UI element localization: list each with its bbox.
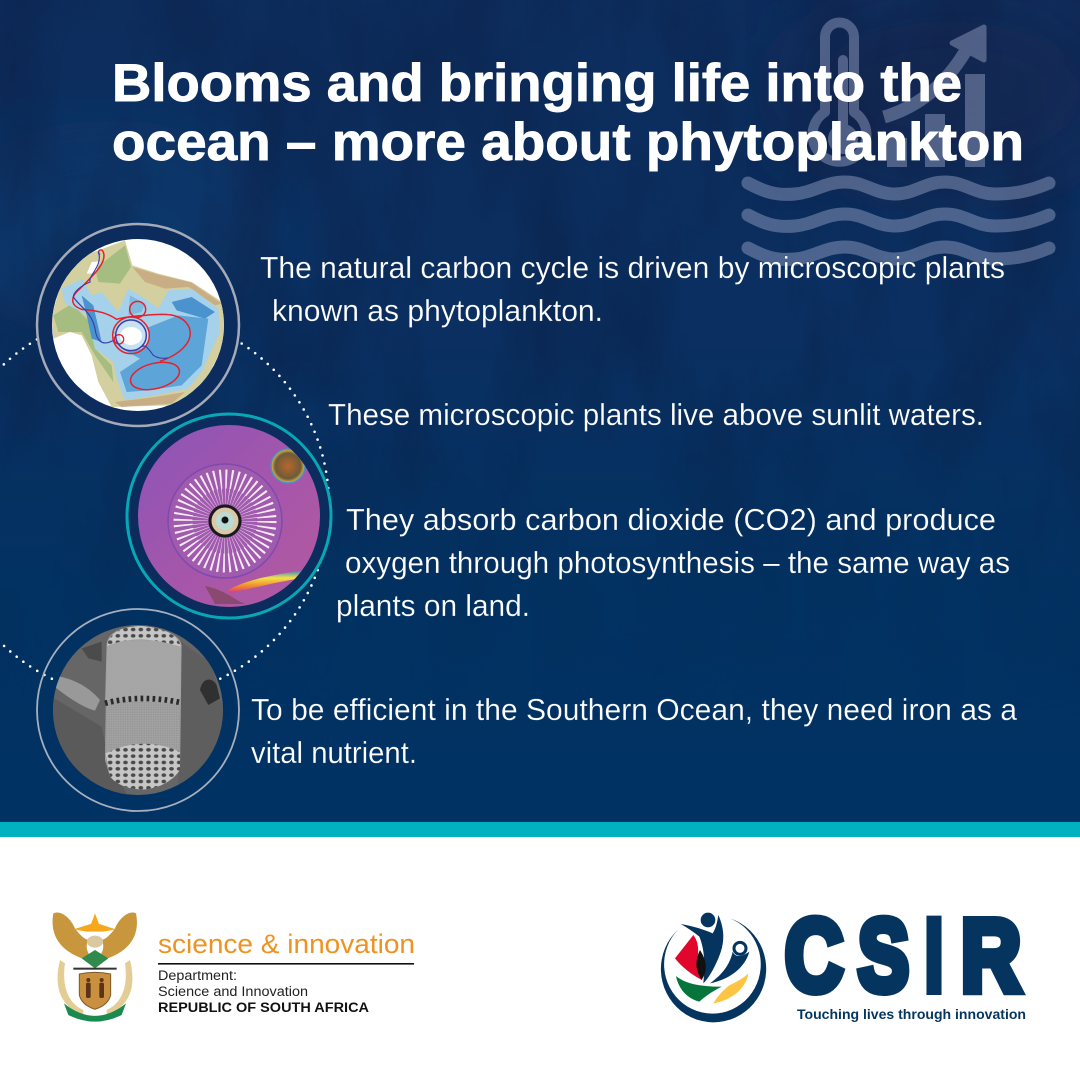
icon: thermometer, rising arrow, bars and waves xyxy=(748,22,1049,259)
logo wordmark: CSIR: S xyxy=(858,898,909,1012)
logo wordmark: CSIR: I xyxy=(925,898,943,1012)
rainbow streak xyxy=(228,570,305,593)
logo wordmark: CSIR: R xyxy=(961,898,1021,1012)
frustule bottom honeycomb xyxy=(106,744,180,789)
text block: carbon cycle xyxy=(260,250,1005,328)
tagline: Touching lives through innovation xyxy=(797,1007,1026,1022)
image circle: diatom microscopy xyxy=(127,414,331,618)
map land xyxy=(52,240,225,407)
text block: photosynthesis: oxygen through photosynthesis – the same way as xyxy=(345,545,1010,580)
logo mark: CSIR emblem xyxy=(661,913,766,1022)
teal divider band xyxy=(0,822,1080,837)
text block: carbon cycle: known as phytoplankton. xyxy=(272,293,603,328)
logo text: science & innovation department: Science and Innovation xyxy=(158,984,308,999)
logo text: science & innovation department: science & innovation xyxy=(158,929,415,959)
logo wordmark: CSIR: C xyxy=(785,898,843,1012)
logo: South African coat of arms xyxy=(53,912,137,1022)
text block: iron nutrient xyxy=(251,692,1018,770)
text block: iron nutrient: To be efficient in the Southern Ocean, they need iron as a xyxy=(251,692,1018,727)
text block: sunlit waters: These microscopic plants live above sunlit waters. xyxy=(328,397,984,432)
title: ocean – more about phytoplankton xyxy=(112,113,1024,172)
diatom disc xyxy=(168,464,282,578)
logo wordmark: CSIR xyxy=(785,898,1021,1012)
frustule upper body xyxy=(105,640,181,703)
text block: carbon cycle: The natural carbon cycle is driven by microscopic plants xyxy=(260,250,1005,285)
text block: photosynthesis xyxy=(336,502,1010,623)
spherical cell xyxy=(271,449,305,483)
text block: iron nutrient: vital nutrient. xyxy=(251,735,417,770)
text block: photosynthesis: They absorb carbon dioxide (CO2) and produce xyxy=(346,502,996,537)
title xyxy=(112,54,1024,172)
image circle: ocean current map xyxy=(37,224,239,426)
map ocean xyxy=(62,279,220,400)
frustule middle slits xyxy=(105,698,181,703)
background: textured navy ocean panel xyxy=(0,0,1080,823)
logo text: science & innovation department: Department: xyxy=(158,968,237,983)
logo text: science & innovation department xyxy=(158,929,415,1015)
logo text: science & innovation department: REPUBLIC OF SOUTH AFRICA xyxy=(158,1000,369,1015)
text block: photosynthesis: plants on land. xyxy=(336,588,530,623)
dotted arc linking the circles xyxy=(0,312,329,698)
title: Blooms and bringing life into the xyxy=(112,54,962,113)
frustule top honeycomb xyxy=(107,626,181,647)
image circle: electron micrograph of diatom xyxy=(37,609,239,811)
